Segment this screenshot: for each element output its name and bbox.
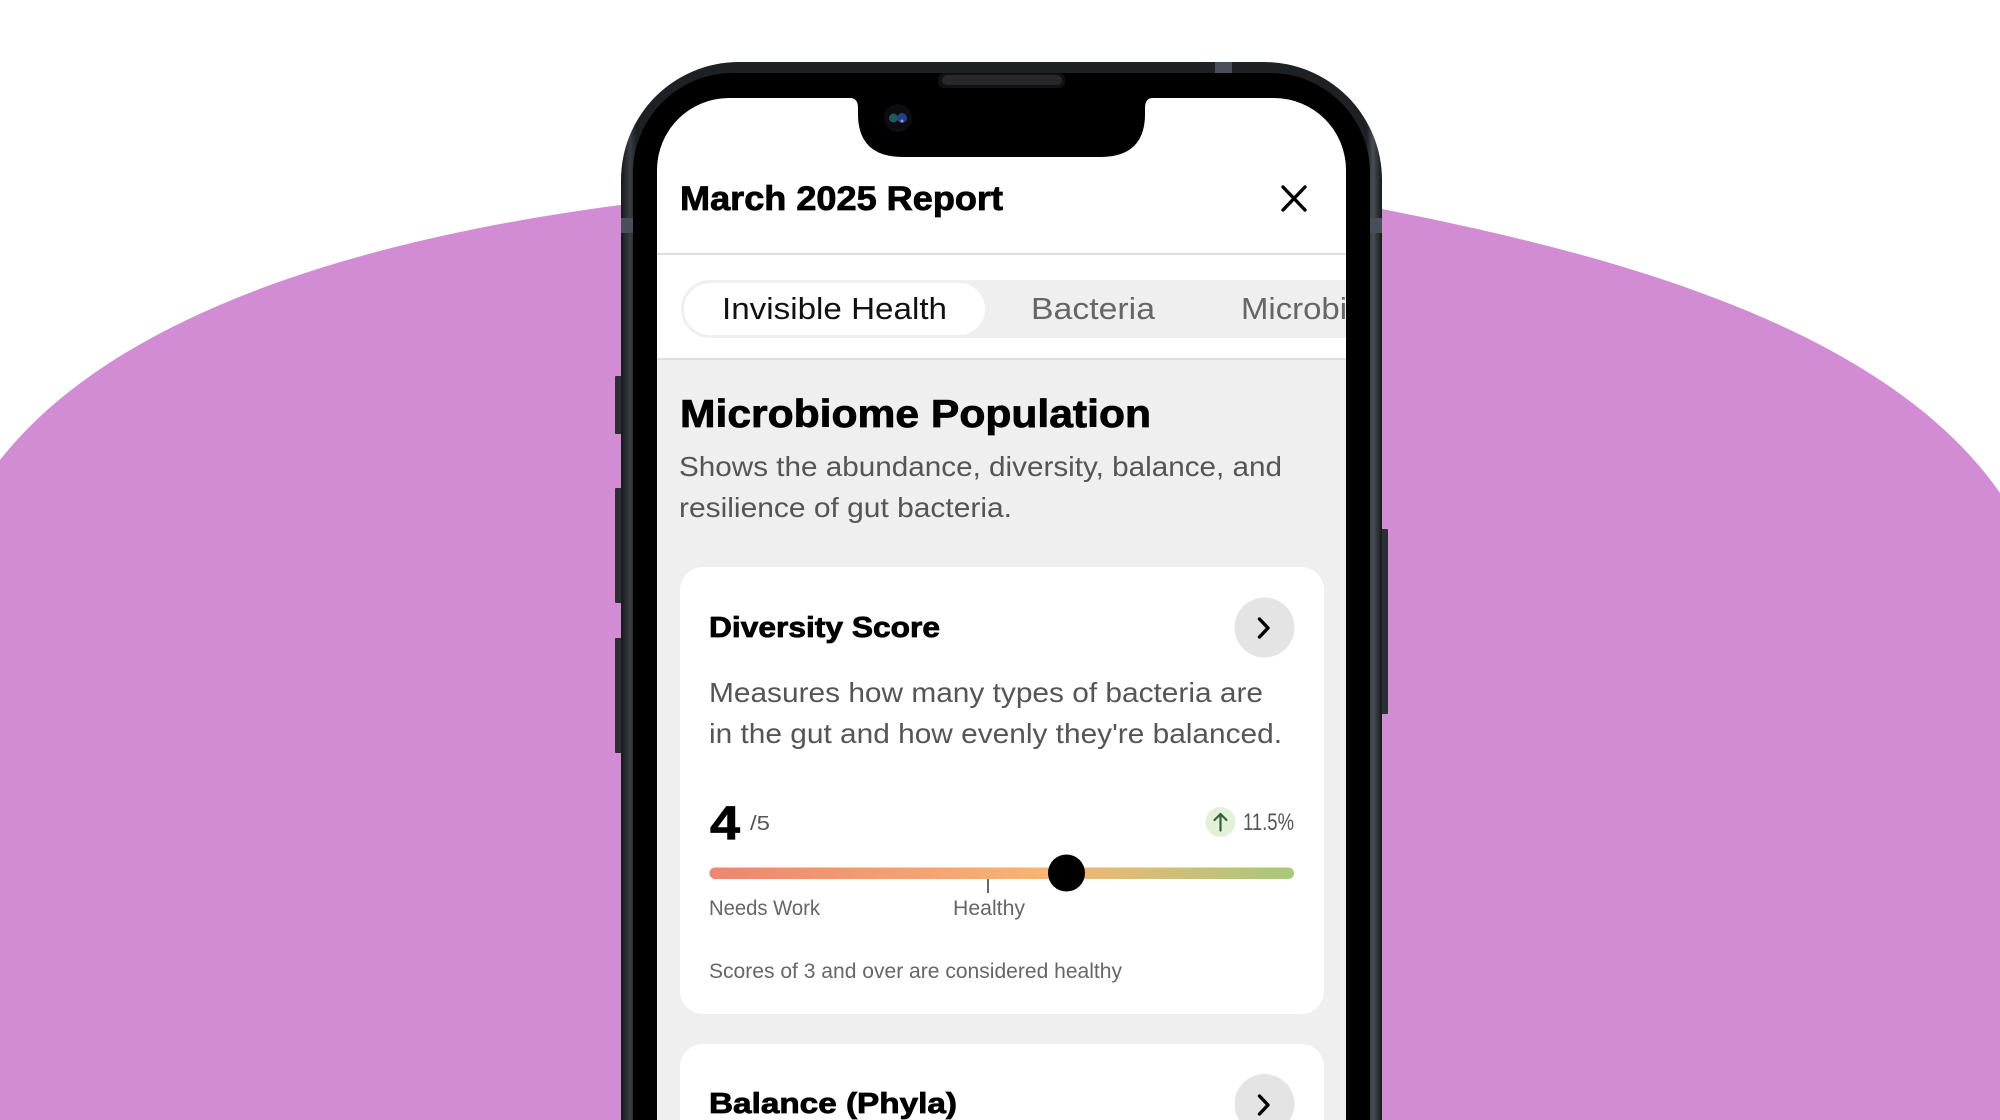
tab bar: [681, 280, 1411, 338]
camera: [884, 104, 912, 132]
phone side buttons: [615, 376, 1388, 753]
tab: Microbiome (cut off): Microbiome: [1241, 291, 1411, 326]
content background: [657, 358, 1346, 1120]
header divider: [657, 253, 1346, 255]
icon: chevron button: [1235, 1074, 1294, 1120]
card heading: Balance (Phyla): [709, 1088, 957, 1120]
black bezel: [633, 73, 1370, 1120]
card description: in the gut and how evenly they're balanced.: [709, 718, 1282, 749]
report header title: March 2025 Report: [680, 180, 1003, 218]
phone screen: [657, 98, 1411, 1120]
tab: Bacteria: Bacteria: [1031, 291, 1156, 326]
section description: Shows the abundance, diversity, balance, and: [679, 451, 1282, 482]
phone mockup: [615, 62, 1411, 1120]
speaker: [938, 73, 1065, 88]
icon: up arrow: [1206, 807, 1236, 837]
panel: diversity score: [680, 567, 1324, 1014]
panel: balance: [680, 1044, 1324, 1120]
label: healthy: Healthy: [953, 897, 1026, 920]
section heading: Microbiome Population: [680, 393, 1151, 436]
footnote: Scores of 3 and over are considered healthy: [709, 960, 1122, 983]
card heading: Diversity Score: [709, 612, 940, 644]
card description: Measures how many types of bacteria are: [709, 677, 1263, 708]
antenna bands: [621, 62, 1382, 233]
tab divider: [657, 358, 1346, 360]
active tab: Invisible Health: [722, 291, 947, 326]
card description: [709, 677, 1282, 749]
icon: chevron button: [1234, 598, 1294, 658]
score value: 4: [710, 796, 740, 849]
phone notch: [845, 90, 1158, 157]
icon: close: [1283, 187, 1305, 210]
score scale: /5: [750, 813, 770, 835]
active tab: [684, 283, 985, 335]
label: needs work: Needs Work: [709, 897, 820, 920]
change percentage: 11.5%: [1243, 809, 1294, 836]
section description: resilience of gut bacteria.: [679, 492, 1012, 523]
score slider: [710, 854, 1294, 893]
section description: [679, 451, 1282, 523]
phone frame: [621, 62, 1382, 1120]
